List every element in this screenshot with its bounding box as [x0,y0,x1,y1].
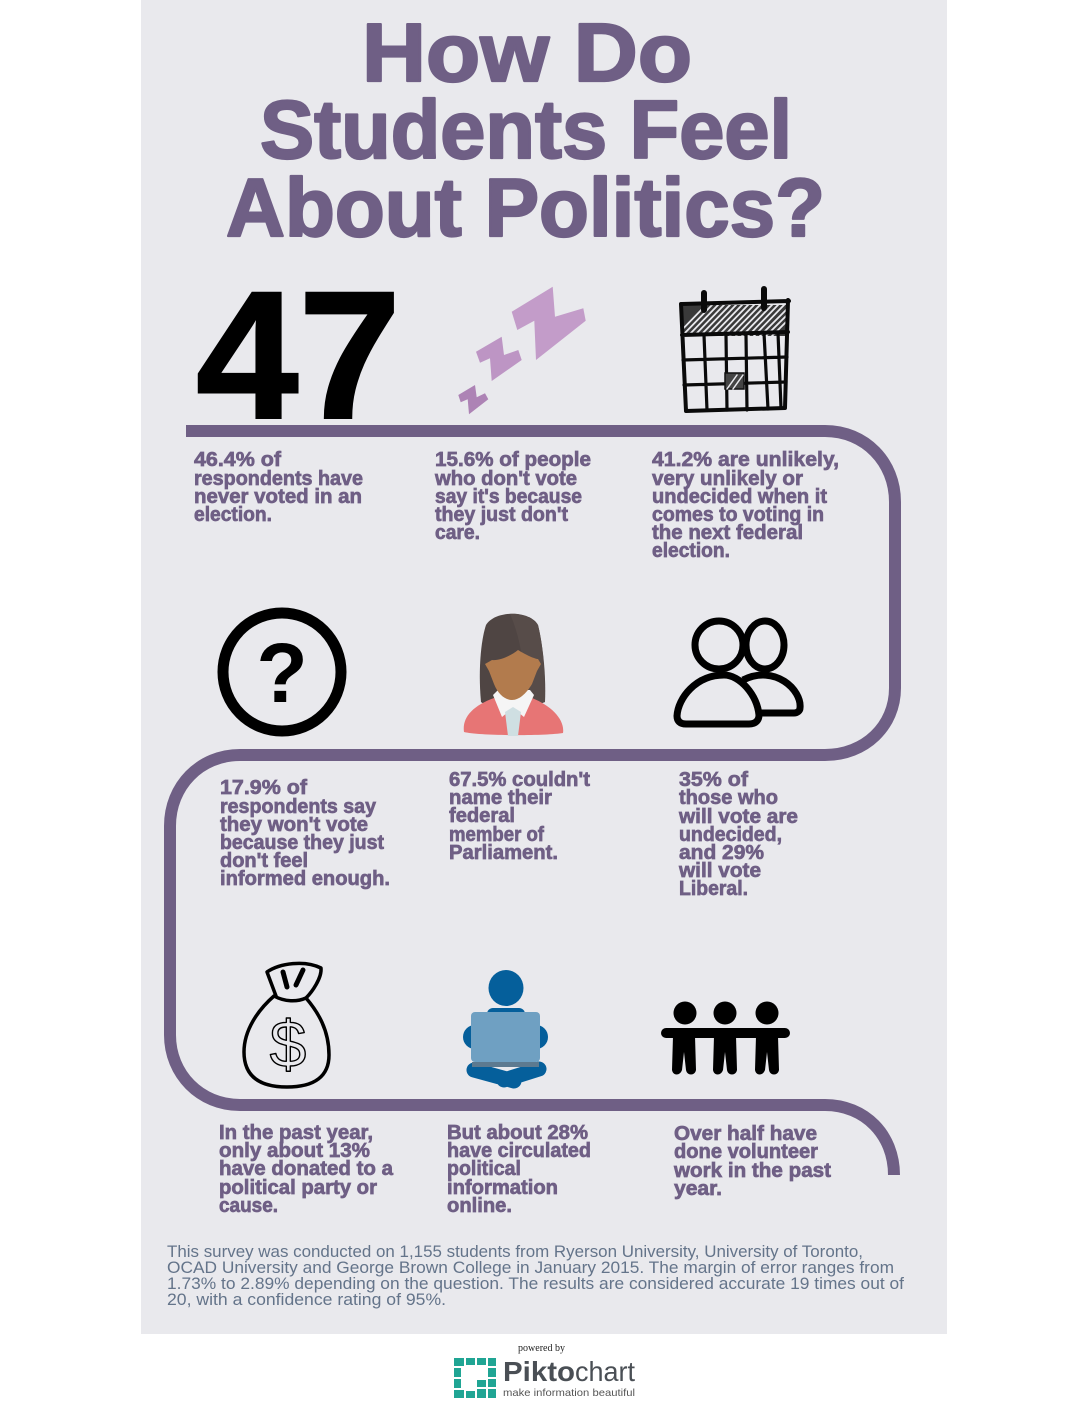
text: 67.5% MP: name their [449,787,552,809]
text: 35% undecided: 35% of [679,769,748,791]
text: 41.2% unlikely: election. [652,540,730,562]
winding timeline path [170,431,895,1175]
text: 35% undecided: and 29% [679,842,764,864]
text: 46.4% never voted: never voted in an [194,486,362,508]
text: 41.2% unlikely: 41.2% are unlikely, [652,449,839,471]
text: 41.2% unlikely: the next federal [652,522,803,544]
title: Students Feel [260,83,792,176]
icon: calendar [676,289,789,411]
text: 15.6% do not care: care. [435,522,480,544]
icon: two people [677,621,800,724]
text: 35% undecided: undecided, [679,824,782,846]
text: survey methodology [167,1242,904,1309]
logo: Piktochart [454,1343,635,1399]
text: 15.6% do not care: who don't vote [434,468,577,490]
text: volunteer work: done volunteer [674,1141,818,1163]
text: 41.2% unlikely: undecided when it [652,486,827,508]
text: 67.5% MP: 67.5% couldn't [449,769,590,791]
icon: woman [464,614,563,736]
text: survey methodology: This survey was conducted on 1,155 students from Ryerson University, University of Toronto, [167,1242,863,1261]
icon: three people [661,1002,790,1074]
text: survey methodology: 20, with a confidence rating of 95%. [167,1290,446,1309]
text: 15.6% do not care [434,449,591,544]
panel: background [141,0,947,1334]
text: 46.4% never voted [194,449,363,526]
text: volunteer work: year. [674,1178,722,1200]
text: 35% undecided: will vote are [678,806,798,828]
text: survey methodology: 1.73% to 2.89% depending on the question. The results are considered accurate 19 times out of [167,1274,904,1293]
text: 35% undecided: will vote [678,860,761,882]
text: 41.2% unlikely: comes to voting in [652,504,824,526]
icon: money bag [244,963,329,1087]
text: 13% donated: political party or [219,1177,377,1199]
text: 13% donated [219,1122,394,1217]
text: 28% circulated: online. [447,1195,512,1217]
icon: sleeping zzz [458,287,586,414]
logo: Piktochart: powered by [518,1343,565,1354]
text: 13% donated: have donated to a [219,1158,394,1180]
text: 17.9% not informed: because they just [220,832,384,854]
text: 28% circulated: But about 28% [447,1122,588,1144]
text: 15.6% do not care: say it's because [435,486,582,508]
text: 28% circulated: information [447,1177,558,1199]
text: volunteer work: Over half have [674,1123,817,1145]
title: About Politics? [226,161,825,254]
text: 17.9% not informed: respondents say [220,796,377,818]
text: 28% circulated: have circulated [447,1140,591,1162]
text: 35% undecided: Liberal. [679,878,748,900]
text: survey methodology: OCAD University and George Brown College in January 2015. The margin of error ranges from [167,1258,894,1277]
text: 67.5% MP: federal [449,805,515,827]
logo: Piktochart: make information beautiful [503,1387,635,1399]
text: 13% donated: cause. [219,1195,278,1217]
text: 17.9% not informed: don't feel [220,850,308,872]
text: 17.9% not informed: 17.9% of [220,777,307,799]
text: 17.9% not informed: they won't vote [220,814,368,836]
text: 15.6% do not care: they just don't [435,504,568,526]
text: 17.9% not informed: informed enough. [220,868,390,890]
text: 28% circulated: political [447,1158,521,1180]
text: 15.6% do not care: 15.6% of people [435,449,591,471]
logo: Piktochart: chart [575,1356,635,1387]
text: 67.5% MP: Parliament. [449,842,558,864]
text: 13% donated: In the past year, [219,1122,373,1144]
icon: person with laptop [463,970,548,1081]
text: 35% undecided: those who [679,787,778,809]
text: 46.4% never voted: 46.4% of [194,449,281,471]
text: volunteer work [673,1123,831,1200]
text: 46.4% never voted: election. [194,504,272,526]
text: 67.5% MP: member of [449,824,544,846]
text: 35% undecided [678,769,798,900]
text: 41.2% unlikely: very unlikely or [652,468,803,490]
big number 47: 47 [196,253,401,457]
text: 13% donated: only about 13% [219,1140,370,1162]
text: 28% circulated [447,1122,591,1217]
logo: Piktochart: Pikto [503,1356,575,1387]
title: How Do [362,6,692,99]
icon: money bag: $ [270,1007,306,1081]
text: 41.2% unlikely [652,449,839,562]
text: 46.4% never voted: respondents have [194,468,363,490]
text: 17.9% not informed [220,777,390,890]
icon: question mark: ? [256,626,308,720]
text: 67.5% MP [449,769,590,864]
text: volunteer work: work in the past [673,1160,831,1182]
icon: question mark [223,613,341,731]
title [226,6,825,254]
